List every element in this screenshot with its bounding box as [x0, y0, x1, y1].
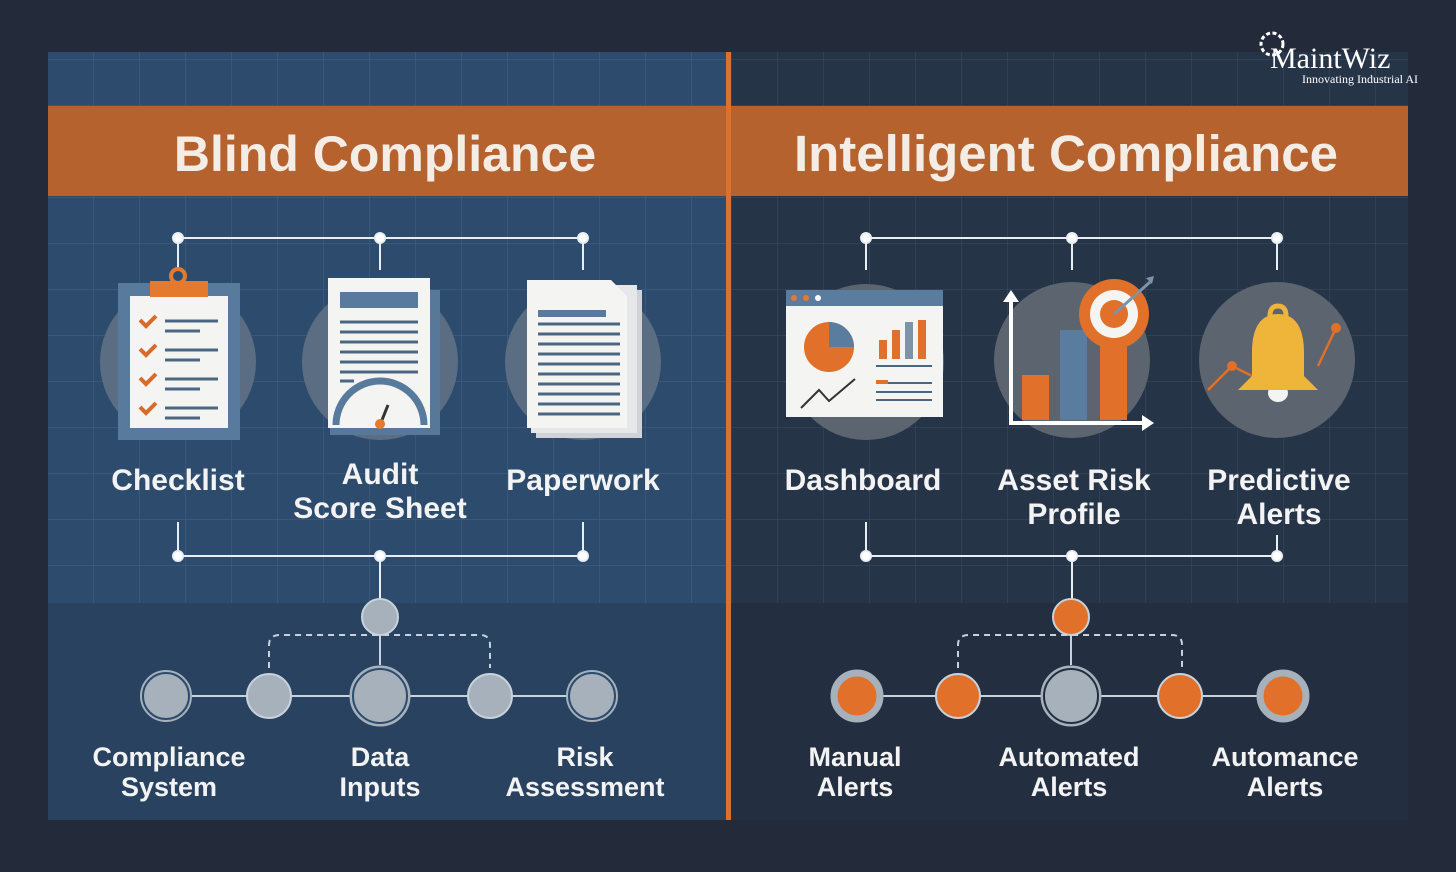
network: left: [143, 599, 615, 723]
logo: MaintWiz: Innovating Industrial AI: [1302, 72, 1418, 86]
labels: right network: Alerts: [817, 772, 893, 802]
labels: right icons: Dashboard: [785, 464, 941, 497]
connector top left: [173, 233, 588, 270]
icon: audit score sheet: [302, 278, 458, 440]
labels: left network: Data: [351, 742, 410, 772]
labels: right network: Alerts: [1031, 772, 1107, 802]
labels: left network: Risk: [556, 742, 614, 772]
labels: left icons: Audit: [342, 458, 418, 491]
labels: right network: Automated: [998, 742, 1140, 772]
heading: blind compliance: [48, 106, 726, 196]
labels: left icons: Score Sheet: [293, 492, 467, 525]
labels: left network: System: [121, 772, 217, 802]
icon: checklist: [100, 269, 256, 440]
logo: MaintWiz: MaintWiz: [1270, 42, 1390, 75]
logo: MaintWiz: [1261, 33, 1418, 86]
icon: dashboard: [786, 284, 944, 440]
panel: intelligent compliance: [731, 52, 1408, 820]
icon: predictive alerts: [1199, 282, 1355, 438]
labels: right network: Manual: [808, 742, 902, 772]
labels: left network: [92, 742, 665, 802]
labels: right network: [808, 742, 1359, 802]
panel: blind compliance: [48, 52, 726, 820]
labels: right icons: Alerts: [1236, 498, 1322, 531]
labels: left network: Inputs: [340, 772, 420, 802]
heading: intelligent compliance: [731, 106, 1408, 196]
connector bottom left: [173, 522, 588, 600]
labels: right network: Automance: [1211, 742, 1359, 772]
labels: left network: Compliance: [92, 742, 246, 772]
labels: left icons: Checklist: [111, 464, 245, 497]
divider: orange: [726, 52, 731, 820]
labels: left icons: Paperwork: [506, 464, 660, 497]
labels: right icons: Predictive: [1207, 464, 1351, 497]
labels: left icons: [111, 458, 660, 525]
connector top right: [861, 233, 1282, 270]
network: right: [834, 599, 1306, 723]
heading: intelligent compliance: Intelligent Compliance: [794, 125, 1338, 182]
icon: asset risk profile: [994, 276, 1154, 438]
heading: blind compliance: Blind Compliance: [174, 126, 596, 182]
labels: right network: Alerts: [1247, 772, 1323, 802]
labels: left network: Assessment: [505, 772, 665, 802]
labels: right icons: [785, 464, 1351, 531]
labels: right icons: Asset Risk: [997, 464, 1151, 497]
icon: paperwork: [505, 280, 661, 440]
labels: right icons: Profile: [1027, 498, 1121, 531]
connector bottom right: [861, 522, 1282, 600]
